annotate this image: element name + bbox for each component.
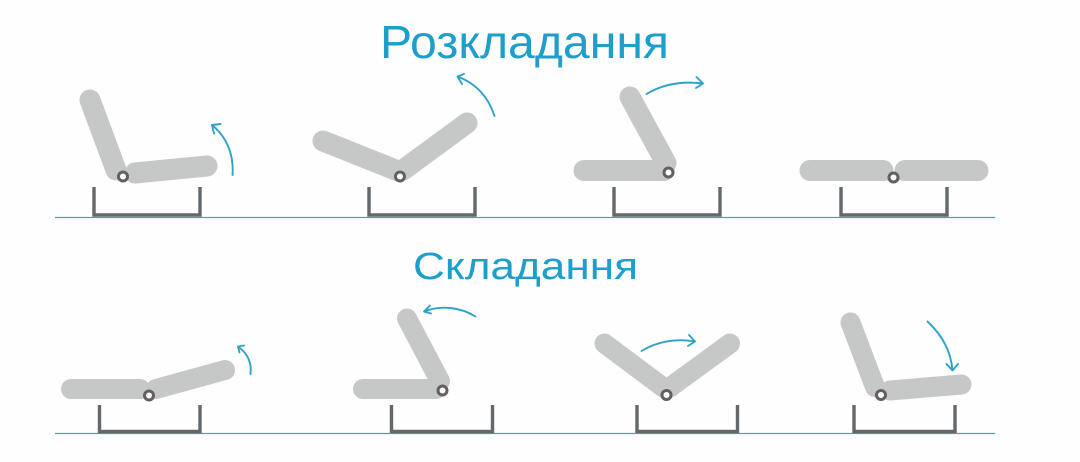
folding step 1 <box>71 346 251 432</box>
folding step 4 <box>850 322 962 432</box>
unfolding step 1 <box>90 100 233 215</box>
unfolding step 2 <box>323 74 494 215</box>
heading: folding: Складання <box>413 246 638 288</box>
floor line: bottom row <box>55 432 995 434</box>
heading: unfolding: Розкладання <box>380 16 669 68</box>
floor line: top row <box>55 216 995 218</box>
folding step 3 <box>604 335 738 432</box>
folding step 2 <box>363 306 492 432</box>
unfolding step 3 <box>584 77 720 215</box>
unfolding step 4 <box>810 170 978 215</box>
